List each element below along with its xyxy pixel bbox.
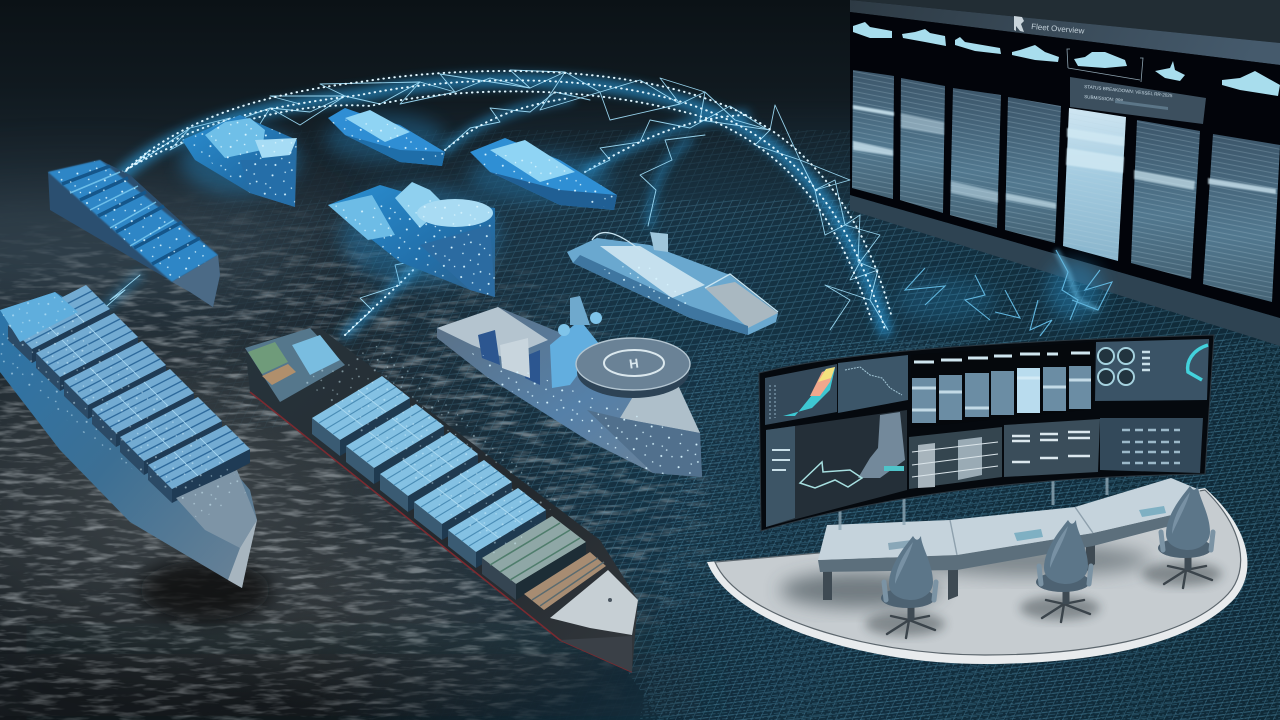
helipad: H <box>628 355 640 372</box>
wall header band <box>850 0 1280 65</box>
ship: central container vessel <box>245 328 638 672</box>
curved console display wall <box>759 335 1214 531</box>
status panel <box>1070 77 1206 124</box>
fleet data tables <box>852 70 1280 302</box>
ship: patrol boat top-centre <box>325 108 445 166</box>
vessel silhouettes <box>853 22 1280 96</box>
ship: research vessel centre <box>328 182 500 297</box>
stern superstructure <box>245 328 345 402</box>
panel: route map <box>766 410 907 527</box>
ship: helideck vessel <box>437 296 702 477</box>
data sparks near wall display <box>895 250 1112 336</box>
status panel: STATUS BREAKDOWN: VESSEL RR-2025 <box>1084 84 1173 98</box>
panel: gauges and coastline <box>1095 339 1209 401</box>
panel: fleet overview mini table <box>911 342 1094 428</box>
screen supports <box>840 470 1107 530</box>
platform shadows <box>780 572 940 608</box>
operator desk <box>818 478 1200 600</box>
ship: survey vessel top-left <box>180 115 300 207</box>
panel: radar chart <box>765 364 837 425</box>
panel: trend chart <box>838 355 908 413</box>
ship: upper-left container vessel <box>48 160 220 307</box>
helipad <box>576 338 690 398</box>
ship: patrol boat top-right <box>468 138 617 210</box>
container ship B sparkle <box>300 340 560 560</box>
wall header band: Fleet Overview <box>1031 22 1085 36</box>
control room platform <box>707 488 1248 664</box>
panel: lower status screens <box>909 418 1203 489</box>
ship: support vessel right <box>567 232 778 335</box>
container ship A sparkle <box>0 292 250 520</box>
ship: far-left container vessel <box>0 285 270 620</box>
wall black screen <box>850 12 1280 318</box>
status panel: SUBMISSION: 998 <box>1084 94 1124 103</box>
data network: connection arcs <box>100 70 892 335</box>
wall display: fleet overview <box>850 0 1280 346</box>
operator chairs <box>865 486 1222 638</box>
